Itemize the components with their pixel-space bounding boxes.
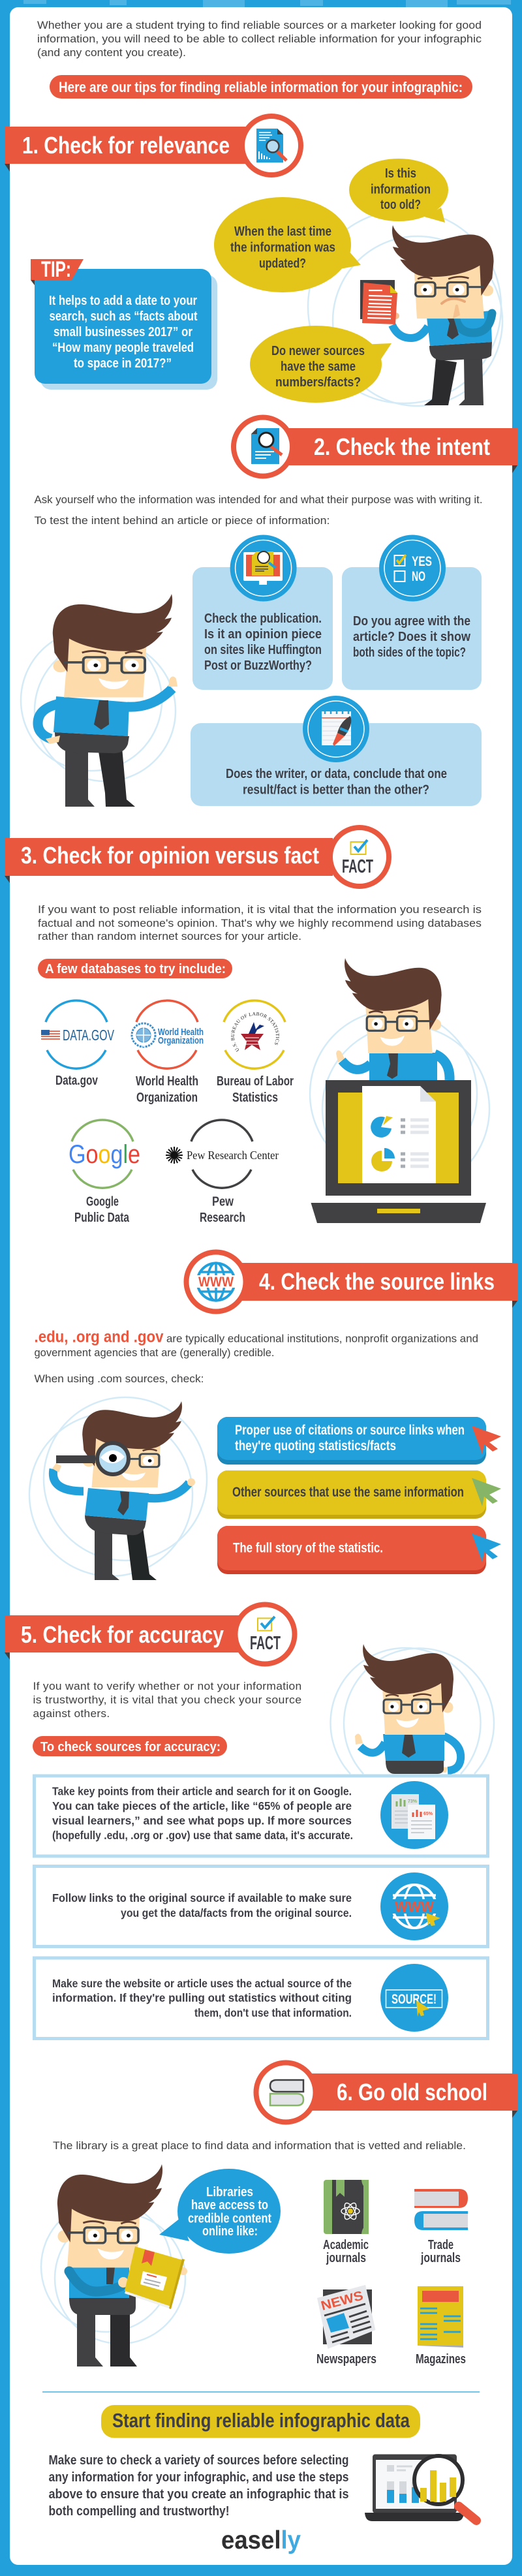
logo: Pew Research: Pew	[212, 1194, 234, 1209]
character with magnifying glass	[29, 1397, 207, 1580]
tip panel: to space in 2017?”	[74, 356, 172, 371]
section 3 paragraph	[38, 903, 482, 942]
speech bubble: newer sources: have the same	[281, 360, 356, 374]
section 3 paragraph: factual and not someone's opinion. That's why we highly recommend using databases	[38, 917, 482, 929]
box: actual source: Make sure the website or article uses the actual source of the	[52, 1977, 352, 1990]
speech bubble: too old: too old?	[380, 198, 421, 212]
box: key points: You can take pieces of the article, like “65% of people are	[52, 1799, 352, 1812]
speech bubble: libraries: have access to	[191, 2198, 268, 2212]
icon: www globe with cursor	[392, 1885, 440, 1928]
card: writer conclusion	[191, 696, 482, 806]
icon: fact check	[250, 1617, 281, 1654]
item: academic journals: journals	[326, 2251, 366, 2265]
logo: Pew Research	[166, 1120, 279, 1225]
section 5 paragraph: against others.	[33, 1707, 110, 1720]
item: newspapers: NEWS	[320, 2288, 365, 2314]
icon: source button	[386, 1990, 442, 2017]
closing heading pill: Start finding reliable infographic data	[112, 2409, 410, 2432]
thoughtful character with document	[308, 210, 502, 406]
tips heading pill: Here are our tips for finding reliable information for your infographic:	[59, 79, 463, 95]
section 2 text: To test the intent behind an article or piece of information:	[34, 514, 330, 527]
logo: Google	[69, 1120, 140, 1225]
item: magazines	[416, 2286, 466, 2367]
item: academic journals: Academic	[323, 2238, 369, 2252]
section 5 paragraph: If you want to verify whether or not your information	[33, 1680, 301, 1692]
laptop with report	[311, 1080, 486, 1223]
tip panel: It helps to add a date to your	[49, 294, 197, 308]
closing paragraph: Make sure to check a variety of sources before selecting	[48, 2453, 348, 2468]
icon: fact check: FACT	[250, 1633, 281, 1654]
section 4 paragraph: government agencies that are (generally) credible.	[34, 1346, 274, 1359]
logo: Pew Research: Research	[200, 1211, 245, 1225]
document held	[360, 280, 397, 324]
section 5 paragraph: is trustworthy, it is vital that you check your source	[33, 1694, 301, 1706]
intro paragraph: Whether you are a student trying to find reliable sources or a marketer looking for good	[37, 19, 482, 31]
section 3 banner	[5, 828, 389, 886]
tips heading pill	[50, 75, 472, 99]
item: trade journals: journals	[420, 2251, 461, 2265]
button: other sources: Other sources that use the same information	[232, 1485, 464, 1500]
card: do you agree	[342, 535, 482, 690]
box: original source	[34, 1867, 488, 1946]
icon: source button: SOURCE!	[392, 1992, 437, 2007]
speech bubble: last updated	[214, 197, 361, 292]
icon: fact check	[342, 840, 373, 877]
speech bubble: libraries: Libraries	[206, 2185, 253, 2199]
section 4 paragraph	[34, 1327, 478, 1385]
intro paragraph: (and any content you create).	[37, 46, 186, 59]
easelly logo: easelly	[221, 2526, 301, 2554]
card: writer conclusion: Does the writer, or data, conclude that one	[226, 767, 447, 781]
speech bubble: last updated: When the last time	[234, 225, 331, 239]
button: citations	[217, 1417, 501, 1465]
card: check the publication: Post or BuzzWorthy?	[204, 659, 312, 673]
logo: World Health Organization: Organization	[136, 1091, 198, 1105]
button: citations: they're quoting statistics/facts	[235, 1438, 396, 1453]
logo: Bureau of Labor Statistics: U.S. BUREAU OF LABOR STATISTICS	[231, 1012, 279, 1052]
speech bubble: newer sources	[250, 326, 392, 403]
card: check the publication: on sites like Huffington	[204, 643, 322, 657]
library sentence: The library is a great place to find data and information that is vetted and reliable.	[53, 2139, 466, 2152]
character above boxes	[330, 1644, 494, 1774]
icon: document with magnifier	[256, 129, 286, 163]
logo: World Health Organization: World Health	[136, 1074, 198, 1089]
speech bubble: too old	[349, 159, 448, 223]
icon: stacked books	[270, 2080, 303, 2105]
section 6 banner	[256, 2062, 517, 2122]
icon: two reports: 65%	[423, 1812, 433, 1816]
closing paragraph: any information for your infographic, and use the steps	[48, 2470, 348, 2485]
button: full story	[217, 1526, 501, 1574]
card: do you agree: article? Does it show	[353, 630, 470, 644]
section 3 paragraph: rather than random internet sources for your article.	[38, 930, 301, 942]
logo: data.gov: Data.gov	[55, 1074, 99, 1088]
logo: Google: Google	[86, 1194, 119, 1209]
closing paragraph	[48, 2453, 348, 2519]
icon: notepad and pen	[322, 711, 351, 746]
section 2 banner: 2. Check the intent	[314, 433, 490, 460]
section 4 banner	[187, 1252, 517, 1312]
icon: laptop and magnifier	[365, 2454, 476, 2521]
box: key points: Take key points from their article and search for it on Google.	[52, 1784, 352, 1797]
section 3 banner: 3. Check for opinion versus fact	[21, 842, 319, 869]
closing paragraph: above to ensure that you create an infographic that is	[48, 2487, 348, 2502]
check buttons	[217, 1417, 501, 1574]
waving character	[21, 594, 177, 807]
tip panel: search, such as “facts about	[50, 309, 198, 324]
closing heading pill	[101, 2405, 420, 2438]
logo: World Health Organization	[132, 1001, 204, 1105]
box: actual source	[34, 1958, 488, 2039]
logo: Google: Public Data	[74, 1211, 130, 1225]
presenter character with laptop	[310, 958, 489, 1223]
card: do you agree: both sides of the topic?	[353, 645, 466, 660]
item: magazines: Magazines	[416, 2352, 466, 2367]
icon: two reports: 73%	[408, 1799, 418, 1804]
logo: World Health Organization: Organization	[158, 1035, 204, 1046]
button: other sources	[217, 1470, 501, 1519]
icon: yes no checkbox	[394, 554, 432, 584]
logo: Bureau of Labor Statistics	[217, 999, 294, 1105]
tip panel: small businesses 2017” or	[54, 325, 192, 339]
button: citations: Proper use of citations or source links when	[235, 1423, 465, 1438]
card: do you agree: Do you agree with the	[353, 614, 470, 628]
databases pill	[38, 959, 232, 978]
section 5 banner	[5, 1604, 295, 1664]
logo: Bureau of Labor Statistics: Bureau of Labor	[217, 1074, 294, 1089]
tip panel: TIP:	[41, 257, 71, 282]
logo: data.gov: DATA.GOV	[63, 1027, 114, 1044]
character with book	[41, 2164, 187, 2367]
button: full story: The full story of the statistic.	[233, 1540, 383, 1556]
accuracy pill	[33, 1736, 227, 1756]
accuracy pill: To check sources for accuracy:	[40, 1740, 221, 1754]
box: key points	[34, 1776, 488, 1856]
speech bubble: too old: Is this	[385, 166, 416, 181]
icon: document search	[251, 428, 282, 464]
logo: Bureau of Labor Statistics: Statistics	[232, 1091, 278, 1105]
box: original source: you get the data/facts from the original source.	[121, 1906, 352, 1919]
logo: data.gov	[41, 1001, 114, 1088]
icon: www globe	[196, 1263, 236, 1301]
section 1 banner	[5, 116, 301, 175]
logo: Pew Research: Pew Research Center	[187, 1149, 279, 1162]
icon: monitor with document	[243, 551, 283, 585]
icon: www globe: WWW	[198, 1275, 234, 1290]
section 2 text: Ask yourself who the information was intended for and what their purpose was with writing it.	[34, 493, 483, 506]
speech bubble: newer sources: Do newer sources	[271, 344, 365, 358]
magnifying glass	[56, 1443, 129, 1474]
item: academic journals	[323, 2180, 369, 2265]
item: newspapers: Newspapers	[316, 2352, 376, 2367]
section 5 paragraph	[33, 1680, 301, 1720]
box: key points: visual learners,” and see what pops up. If more sources	[52, 1814, 352, 1827]
icon: fact check: FACT	[342, 856, 373, 877]
box: actual source: them, don't use that information.	[194, 2006, 352, 2019]
logo: Google: Google	[69, 1140, 140, 1169]
speech bubble: libraries	[159, 2169, 281, 2254]
section 6 banner: 6. Go old school	[337, 2079, 487, 2105]
intro paragraph: information, you will need to be able to collect reliable information for your infographic	[37, 33, 482, 45]
icon: www globe with cursor: WWW	[395, 1898, 434, 1915]
item: newspapers	[316, 2285, 376, 2367]
speech bubble: libraries: online like:	[202, 2224, 258, 2239]
section 1 banner: 1. Check for relevance	[22, 132, 230, 159]
closing paragraph: both compelling and trustworthy!	[48, 2504, 230, 2519]
card: check the publication: Is it an opinion piece	[204, 627, 322, 642]
icon: two reports	[392, 1794, 435, 1839]
section 2 banner	[234, 418, 517, 476]
box: actual source: information. If they're pulling out statistics without citing	[52, 1991, 352, 2004]
card: check the publication: Check the publication.	[204, 612, 322, 626]
icon: yes no checkbox: NO	[412, 569, 425, 584]
section 4 paragraph: are typically educational institutions, nonprofit organizations and	[166, 1333, 478, 1344]
speech bubble: last updated: the information was	[230, 240, 335, 255]
speech bubble: too old: information	[371, 183, 431, 197]
item: trade journals: Trade	[428, 2238, 453, 2252]
speech bubble: libraries: credible content	[188, 2211, 271, 2226]
card: writer conclusion: result/fact is better than the other?	[243, 783, 429, 798]
section 2 text	[34, 493, 483, 527]
speech bubble: newer sources: numbers/facts?	[275, 375, 361, 390]
logo: World Health Organization: World Health	[158, 1027, 204, 1038]
intro paragraph	[37, 19, 482, 59]
box: key points: (hopefully .edu, .org or .gov) use that same data, it's accurate.	[52, 1829, 353, 1842]
speech bubble: last updated: updated?	[259, 256, 306, 271]
item: trade journals	[414, 2189, 468, 2265]
icon: yes no checkbox: YES	[412, 554, 432, 569]
section 5 banner: 5. Check for accuracy	[21, 1621, 224, 1648]
section 4 paragraph: When using .com sources, check:	[34, 1373, 204, 1385]
tip panel	[31, 257, 217, 390]
section 3 paragraph: If you want to post reliable information, it is vital that the information you research is	[38, 903, 482, 916]
section 4 paragraph: .edu, .org and .gov	[34, 1327, 164, 1346]
yellow book	[125, 2246, 185, 2309]
tip panel: “How many people traveled	[52, 341, 194, 355]
databases pill: A few databases to try include:	[45, 962, 226, 976]
box: original source: Follow links to the original source if available to make sure	[52, 1891, 352, 1904]
card: check the publication	[192, 535, 333, 690]
